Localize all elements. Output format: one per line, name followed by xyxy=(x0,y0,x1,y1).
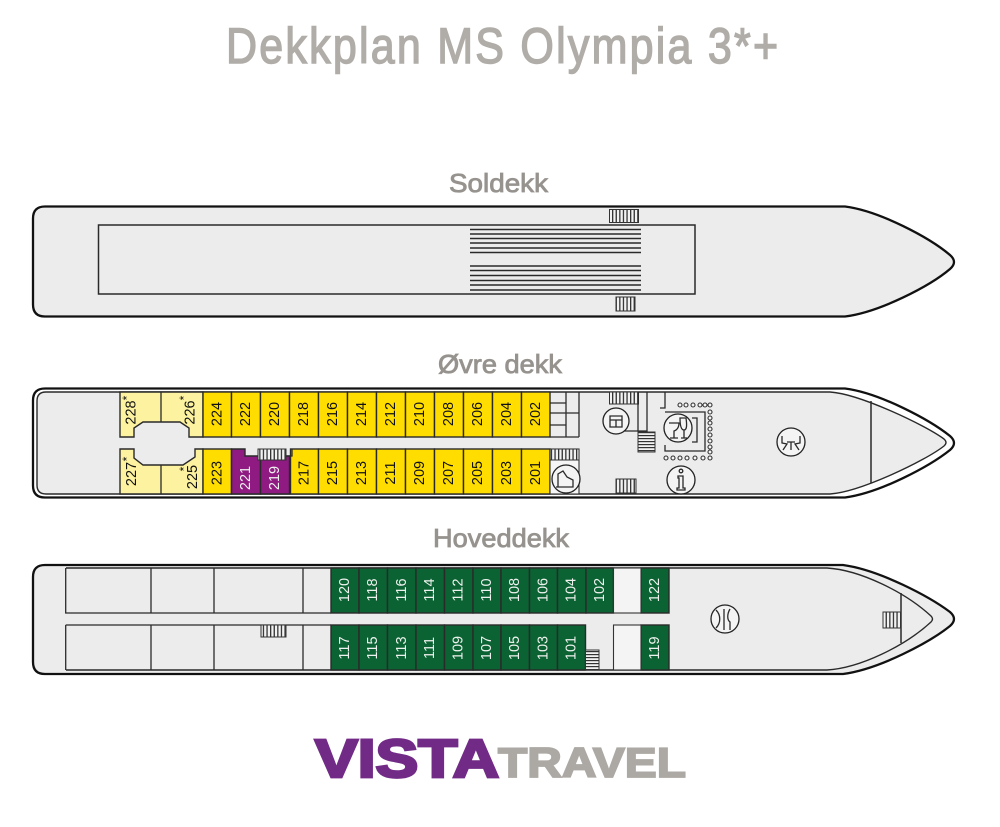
suite numbers: 225 xyxy=(185,465,201,489)
title: Dekkplan MS Olympia 3*+ xyxy=(226,18,778,74)
suite numbers: 227 xyxy=(124,462,140,486)
yellow cabins lower row xyxy=(203,449,550,494)
green cabins lower row: 119 xyxy=(647,636,663,660)
icon: information xyxy=(667,466,695,494)
stairs forward cabins xyxy=(586,650,599,670)
green cabins upper row xyxy=(331,568,669,613)
green cabins upper row: 112 xyxy=(450,578,466,602)
columns xyxy=(664,403,712,460)
green cabins upper row: 114 xyxy=(422,578,438,602)
yellow cabins upper row xyxy=(203,392,550,437)
yellow cabins lower row: 213 xyxy=(354,461,370,485)
icon: wine glasses bar xyxy=(664,414,692,442)
yellow cabins upper row: 224 xyxy=(210,402,226,426)
yellow cabins upper row: 204 xyxy=(499,402,515,426)
green cabins lower row: 103 xyxy=(536,636,552,660)
logo word: TRAVEL: TRAVEL xyxy=(498,739,686,786)
suite numbers: * xyxy=(120,456,134,461)
yellow cabins upper row: 216 xyxy=(325,402,341,426)
heading: Hoveddekk: Hoveddekk xyxy=(433,523,570,553)
yellow cabins upper row: 210 xyxy=(412,402,428,426)
deck: Soldekk xyxy=(33,206,954,316)
green cabins upper row: 106 xyxy=(536,578,552,602)
suite numbers: * xyxy=(177,395,191,400)
suite numbers xyxy=(120,395,201,489)
deck: Øvre dekk xyxy=(33,388,954,498)
green cabins lower row xyxy=(331,625,669,670)
suite numbers: 226 xyxy=(182,400,198,425)
bar counter xyxy=(660,392,705,451)
yellow cabins lower row: 205 xyxy=(470,461,486,485)
suite dividers xyxy=(160,392,162,494)
service room lower xyxy=(550,449,579,494)
bow divider xyxy=(900,593,902,643)
service rooms upper xyxy=(550,392,579,437)
heading: Øvre dekk: Øvre dekk xyxy=(438,349,563,379)
pale yellow suites upper xyxy=(120,392,203,437)
green cabins lower row: 105 xyxy=(507,636,523,660)
yellow cabins lower row: 217 xyxy=(296,461,312,485)
suite numbers: 228 xyxy=(124,400,140,425)
green cabins lower row: 111 xyxy=(422,637,438,659)
green cabins upper row: 110 xyxy=(479,578,495,602)
yellow cabins upper row: 218 xyxy=(296,402,312,426)
heading: Soldekk: Soldekk xyxy=(449,168,549,198)
yellow cabins upper row: 208 xyxy=(441,402,457,426)
yellow cabins lower row: 209 xyxy=(412,461,428,485)
suite numbers: * xyxy=(120,395,134,400)
deck: Hoveddekk xyxy=(33,565,954,674)
green cabins upper row: 108 xyxy=(507,578,523,602)
sun deck frame xyxy=(98,225,695,294)
green cabins upper row: 118 xyxy=(365,578,381,602)
hull xyxy=(33,565,954,674)
small notch xyxy=(286,449,292,456)
stairs aft xyxy=(261,625,286,637)
hull xyxy=(33,206,954,316)
logo: Vista Travel xyxy=(315,729,686,789)
bow divider xyxy=(870,401,872,483)
stairs top xyxy=(610,210,638,222)
purple cabins: 219 xyxy=(267,466,283,490)
green cabins upper row: 122 xyxy=(647,578,663,602)
purple cabins: 221 xyxy=(238,466,254,490)
empty room upper xyxy=(614,568,641,613)
green cabins lower row: 115 xyxy=(365,636,381,660)
stairs midship top xyxy=(610,392,638,404)
yellow cabins lower row: 203 xyxy=(499,461,515,485)
green cabins lower row: 113 xyxy=(394,636,410,660)
yellow cabins upper row: 214 xyxy=(354,402,370,426)
green cabins lower row: 101 xyxy=(564,636,580,660)
purple cabins xyxy=(232,449,290,494)
public rooms xyxy=(66,568,331,670)
yellow cabins upper row: 220 xyxy=(267,402,283,426)
hull xyxy=(33,388,954,498)
empty room lower xyxy=(614,625,641,670)
yellow cabins lower row: 207 xyxy=(441,461,457,485)
yellow cabins upper row: 222 xyxy=(238,402,254,426)
stairs xyxy=(550,449,579,460)
green cabins lower row: 117 xyxy=(337,636,353,660)
yellow cabins lower row: 223 xyxy=(210,461,226,485)
icon: shop xyxy=(603,408,629,434)
green cabins lower row: 109 xyxy=(450,636,466,660)
yellow cabins lower row: 211 xyxy=(383,461,399,485)
green cabins upper row: 102 xyxy=(592,578,608,602)
green cabins upper row: 104 xyxy=(564,578,580,602)
inner hull xyxy=(66,568,932,670)
yellow cabins lower row: 215 xyxy=(325,461,341,485)
green cabins upper row: 116 xyxy=(394,578,410,602)
yellow cabins lower row: 201 xyxy=(528,461,544,485)
yellow cabins upper row: 212 xyxy=(383,402,399,426)
logo word: VISTA: VISTA xyxy=(315,729,499,789)
stairs midship side xyxy=(638,432,655,452)
suite numbers: * xyxy=(177,466,191,471)
green cabins upper row: 120 xyxy=(337,578,353,602)
partition lines xyxy=(616,392,647,435)
green cabins lower row: 107 xyxy=(479,636,495,660)
stairs bottom xyxy=(616,297,635,311)
corridor stairs xyxy=(258,449,286,460)
icon: lounge table xyxy=(777,428,805,456)
pale yellow suites lower xyxy=(120,449,203,494)
icon: reception xyxy=(552,465,580,493)
stairs bow xyxy=(883,612,901,628)
icon: restaurant xyxy=(711,605,739,633)
yellow cabins upper row: 206 xyxy=(470,402,486,426)
inner hull xyxy=(37,392,946,494)
sun loungers xyxy=(470,230,641,290)
stairs midship lower xyxy=(616,479,636,493)
yellow cabins upper row: 202 xyxy=(528,402,544,426)
